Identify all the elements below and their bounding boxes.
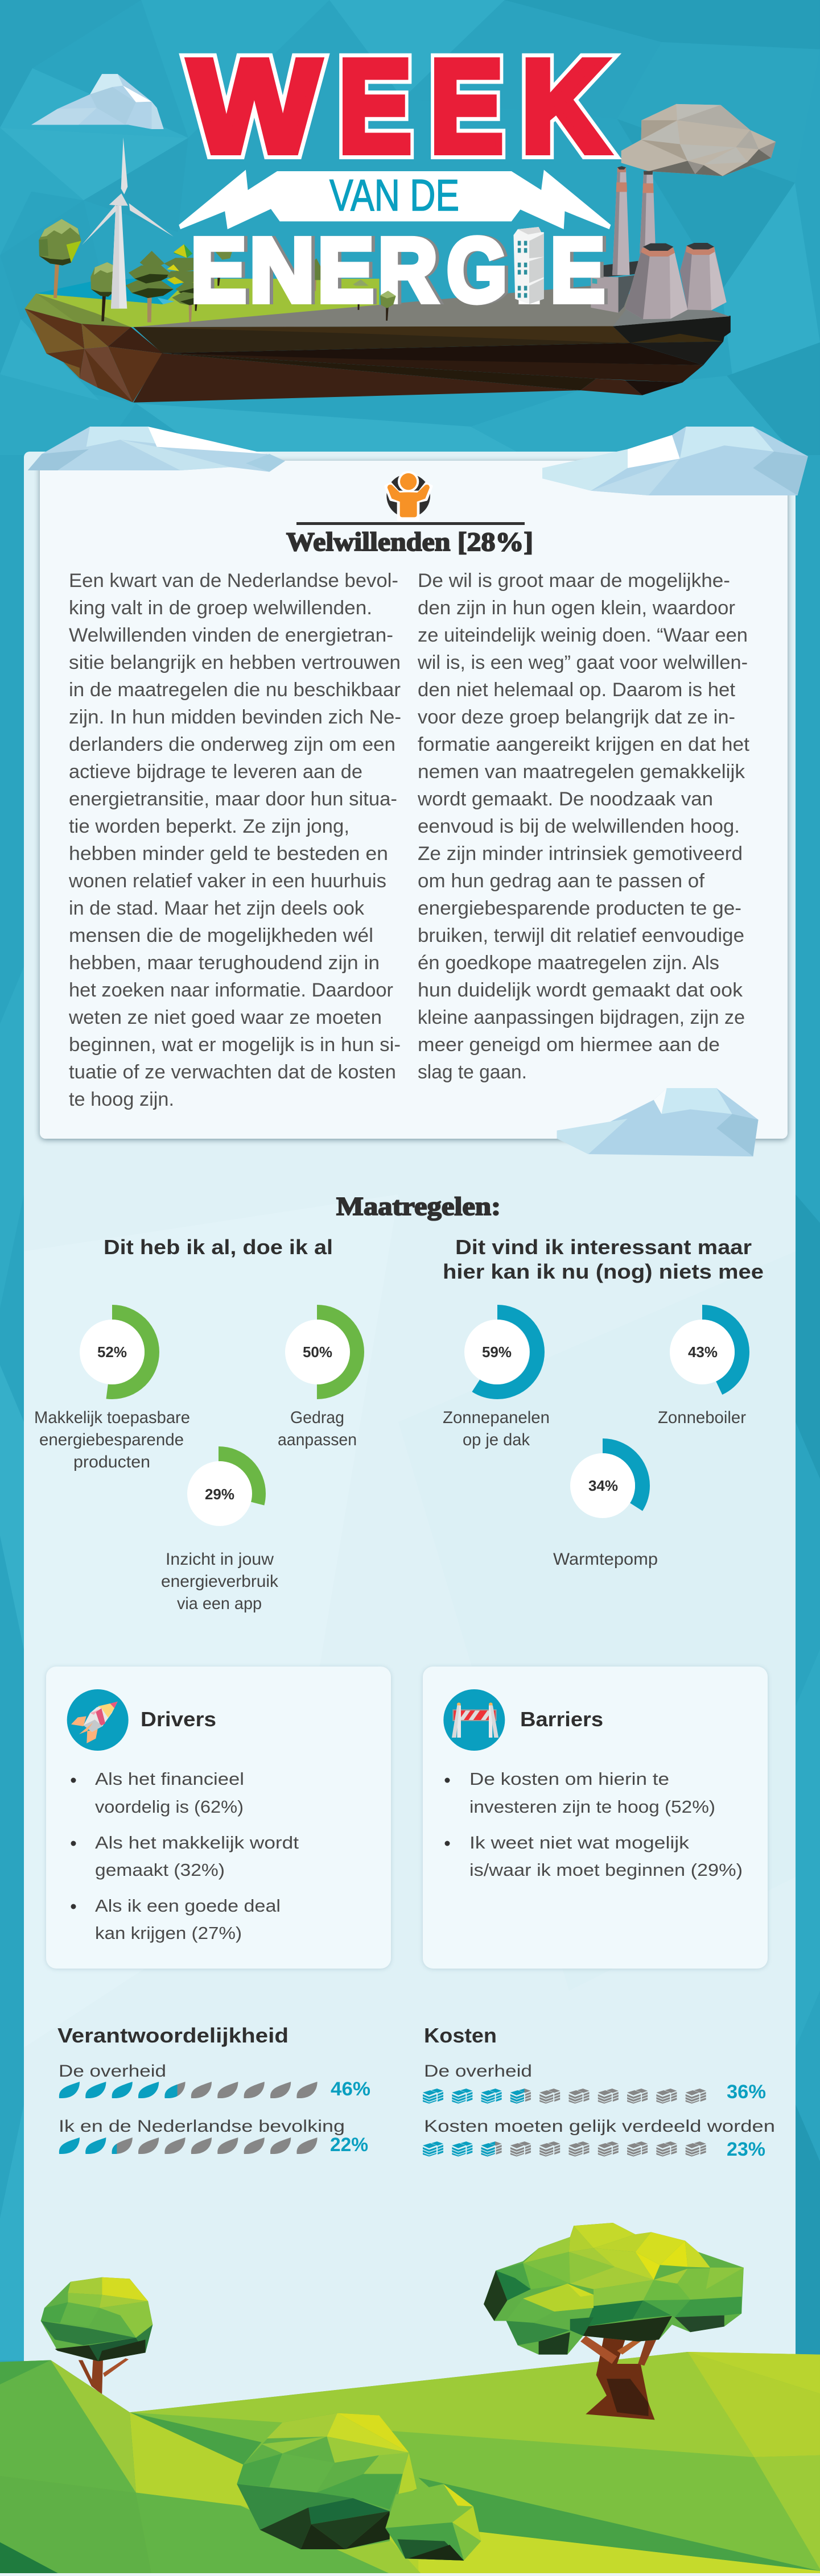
heading: Kosten: Kosten <box>424 2024 497 2047</box>
text block: left column: energietransitie, maar door hun situa- <box>69 788 397 810</box>
label: Inzicht: via een app <box>177 1594 262 1613</box>
title: W <box>189 33 319 179</box>
text block: left column: het zoeken naar informatie. Daardoor <box>69 979 393 1001</box>
label: Zonnepanelen <box>443 1408 550 1449</box>
title: E <box>339 33 411 179</box>
list: barriers: Ik weet niet wat mogelijk <box>469 1833 690 1853</box>
label: Makkelijk toepasbare <box>34 1408 190 1471</box>
tree: round left <box>39 219 81 298</box>
section: Kosten <box>423 2024 775 2160</box>
title: E <box>550 219 605 321</box>
title: VAN DE <box>329 170 459 220</box>
label: Zonneboiler: Zonneboiler <box>658 1408 746 1427</box>
text block: left column: hebben, maar terughoudend zijn in <box>69 952 380 974</box>
panel: Drivers <box>46 1667 391 1969</box>
text block: left column: te hoog zijn. <box>69 1089 174 1110</box>
text block: right column: voor deze groep belangrijk dat ze in- <box>418 706 735 728</box>
pictogram row: leaves 22% <box>59 2137 318 2154</box>
section: Maatregelen <box>34 1192 764 1613</box>
donut: 34%: 34% <box>588 1477 618 1494</box>
bush: large <box>237 2413 417 2549</box>
heading: Welwillenden: Welwillenden [28%] <box>286 527 533 557</box>
donut: 29% <box>179 1454 258 1533</box>
label: Gedrag aanpassen <box>278 1408 357 1449</box>
text block: right column: energiebesparende producten te ge- <box>418 898 741 919</box>
value: 22%: 22% <box>330 2134 368 2156</box>
title: E <box>318 219 374 321</box>
ice: card top left <box>28 427 285 472</box>
donut: 34% <box>563 1446 642 1525</box>
icon: wind turbine <box>82 138 174 309</box>
heading: Barriers: Barriers <box>520 1707 603 1731</box>
panel: page background <box>24 452 796 2576</box>
text block: left column: wonen relatief vaker in een huurhuis <box>68 870 386 892</box>
heading: Drivers: Drivers <box>141 1707 216 1731</box>
label: Makkelijk toepasbare: Makkelijk toepasbare <box>34 1408 190 1427</box>
value: 23%: 23% <box>727 2139 765 2160</box>
donut: 52%: 52% <box>97 1343 127 1361</box>
text block: right column: De wil is groot maar de mogelijkhe- <box>418 570 730 592</box>
label: De overheid: De overheid <box>59 2062 166 2081</box>
island: floating land <box>24 279 731 403</box>
title: N <box>249 219 315 321</box>
text block: right column: slag te gaan. <box>418 1061 527 1083</box>
title: banner <box>179 169 611 229</box>
title: E <box>339 33 411 179</box>
label: Zonnepanelen: op je dak <box>463 1430 530 1449</box>
text block: left column: hebben minder geld te besteden en <box>69 843 388 865</box>
text block: right column: eenvoud is bij de welwillenden hoog. <box>418 816 740 837</box>
label: Gedrag aanpassen: Gedrag <box>290 1408 344 1427</box>
donut: 43% <box>662 1312 742 1392</box>
label: Makkelijk toepasbare: producten <box>73 1453 150 1471</box>
text block: left column: beginnen, wat er mogelijk is in hun si- <box>69 1034 401 1056</box>
list: drivers <box>71 1769 299 1943</box>
title: E <box>430 33 503 179</box>
title: G <box>450 219 510 321</box>
title: R <box>378 219 438 321</box>
text block: right column: wil is, is een weg” gaat voor welwillen- <box>417 652 748 673</box>
value: 36%: 36% <box>727 2081 766 2103</box>
text block: right column: kleine aanpassingen bijdragen, zijn ze <box>418 1007 745 1028</box>
text block: right column: meer geneigd om hiermee aan de <box>418 1034 720 1056</box>
donut: 43%: 43% <box>688 1343 718 1361</box>
heading: Dit vind ik interessant: hier kan ik nu (nog) niets mee <box>443 1260 764 1283</box>
title: E <box>430 33 503 179</box>
list: barriers: is/waar ik moet beginnen (29%) <box>469 1860 743 1880</box>
icon: road barrier <box>443 1689 505 1751</box>
list: drivers: Als het financieel <box>95 1769 244 1789</box>
donut: 59%: 59% <box>482 1343 512 1361</box>
text block: left column: in de stad. Maar het zijn deels ook <box>69 898 365 919</box>
text block: right column: ze uiteindelijk weinig doen. “Waar een <box>418 625 748 646</box>
title: N <box>253 219 318 321</box>
ice: card top right <box>542 427 808 495</box>
icon: person shrugging <box>386 471 431 519</box>
pictogram row: leaves 46% <box>59 2082 318 2098</box>
section: Verantwoordelijkheid <box>57 2024 370 2156</box>
bush: small <box>385 2484 481 2561</box>
landscape: green hills <box>0 2352 820 2574</box>
text block: right column: formatie aangereikt krijgen en dat het <box>418 734 750 755</box>
tree: pine behind letters <box>164 244 208 322</box>
text block: left column: weten ze niet goed waar ze moeten <box>68 1007 382 1028</box>
title: R <box>381 219 441 321</box>
heading: Dit heb ik al: Dit heb ik al, doe ik al <box>104 1235 333 1259</box>
text block: right column: nemen van maatregelen gemakkelijk <box>418 761 745 783</box>
heading: Maatregelen: Maatregelen: <box>336 1192 501 1221</box>
list: drivers: gemaakt (32%) <box>95 1860 225 1880</box>
text block: left column: zijn. In hun midden bevinden zich Ne- <box>69 706 401 728</box>
label: Gedrag aanpassen: aanpassen <box>278 1430 357 1449</box>
donut: 50%: 50% <box>303 1343 332 1361</box>
title: I <box>515 219 543 321</box>
cloud: factory smoke <box>621 104 776 176</box>
list: drivers: voordelig is (62%) <box>95 1797 244 1817</box>
text block: right column: Ze zijn minder intrinsiek gemotiveerd <box>418 843 743 865</box>
text block: right column <box>417 570 750 1083</box>
ice: card bottom right <box>557 1088 759 1156</box>
panel: Barriers <box>423 1667 768 1969</box>
tree: pine <box>126 251 174 322</box>
text block: left column: tuatie of ze verwachten dat de kosten <box>69 1061 396 1083</box>
list: drivers: kan krijgen (27%) <box>95 1923 242 1943</box>
label: Warmtepomp: Warmtepomp <box>553 1550 658 1569</box>
text block: left column: derlanders die onderweg zijn om een <box>69 734 395 755</box>
donut: 50% <box>277 1312 357 1392</box>
rule <box>296 522 525 525</box>
text block: right column: én goedkope maatregelen zijn. Als <box>418 952 719 974</box>
heading: Dit vind ik interessant <box>443 1235 764 1283</box>
heading: Verantwoordelijkheid: Verantwoordelijkheid <box>57 2024 289 2047</box>
text block: left column: Welwillenden vinden de energietran- <box>69 625 393 646</box>
title: E <box>191 219 246 321</box>
text block: right column: hun duidelijk wordt gemaakt dat ook <box>418 979 743 1001</box>
title: W <box>189 33 319 179</box>
bottom edge <box>0 2573 820 2576</box>
label: Ik en de Nederlandse bevolking: Ik en de Nederlandse bevolking <box>59 2117 345 2136</box>
tree: round second <box>90 262 114 321</box>
text block: left column <box>68 570 401 1110</box>
text block: left column: in de maatregelen die nu beschikbaar <box>69 679 401 701</box>
text block: left column: Een kwart van de Nederlandse bevol- <box>69 570 398 592</box>
pictogram row: money 23% <box>423 2141 706 2157</box>
text block: left column: tie worden beperkt. Ze zijn jong, <box>69 816 349 837</box>
panel: intro card <box>40 461 788 1139</box>
title <box>179 33 611 321</box>
label: Inzicht: energieverbruik <box>161 1572 279 1591</box>
text block: left column: king valt in de groep welwillenden. <box>69 597 372 619</box>
tree: left on hill <box>41 2277 153 2395</box>
text block: left column: sitie belangrijk en hebben vertrouwen <box>69 652 401 673</box>
title: E <box>554 219 608 321</box>
text block: left column: mensen die de mogelijkheden wél <box>69 925 373 946</box>
tree: right large <box>484 2223 744 2420</box>
donut: 29%: 29% <box>205 1486 234 1503</box>
label: Kosten moeten gelijk verdeeld worden: Kosten moeten gelijk verdeeld worden <box>424 2117 775 2136</box>
tree: small ones between letters <box>213 250 369 310</box>
icon: apartment building <box>513 227 544 304</box>
label: Makkelijk toepasbare: energiebesparende <box>39 1430 184 1449</box>
text block: right column: wordt gemaakt. De noodzaak van <box>417 788 713 810</box>
label: De overheid: De overheid <box>424 2062 532 2081</box>
heading: Dit vind ik interessant: Dit vind ik interessant maar <box>455 1235 752 1259</box>
title: E <box>194 219 250 321</box>
title: G <box>447 219 507 321</box>
title: K <box>521 33 608 179</box>
pictogram row: money 36% <box>423 2089 706 2103</box>
donut: 52% <box>72 1312 152 1392</box>
label: Inzicht <box>161 1550 279 1613</box>
list: barriers <box>445 1769 743 1880</box>
text block: right column: den zijn in hun ogen klein, waardoor <box>418 597 735 619</box>
title: K <box>521 33 608 179</box>
title: E <box>321 219 377 321</box>
text block: left column: actieve bijdrage te leveren aan de <box>69 761 362 783</box>
text block: right column: om hun gedrag aan te passen of <box>418 870 705 892</box>
factory: chimneys, cooling towers <box>591 166 727 319</box>
list: drivers: Als ik een goede deal <box>95 1896 281 1916</box>
donut: 59% <box>458 1312 537 1392</box>
text block: right column: bruiken, terwijl dit relatief eenvoudige <box>418 925 744 946</box>
label: Inzicht: Inzicht in jouw <box>166 1550 274 1569</box>
icon: rocket <box>67 1689 129 1751</box>
cloud: ice top left <box>31 74 164 129</box>
label: Zonnepanelen: Zonnepanelen <box>443 1408 550 1427</box>
value: 46%: 46% <box>331 2078 370 2100</box>
list: barriers: investeren zijn te hoog (52%) <box>469 1797 715 1817</box>
text block: right column: den niet helemaal op. Daarom is het <box>418 679 736 701</box>
list: drivers: Als het makkelijk wordt <box>95 1833 299 1853</box>
tree: small front <box>380 291 396 321</box>
list: barriers: De kosten om hierin te <box>469 1769 669 1789</box>
